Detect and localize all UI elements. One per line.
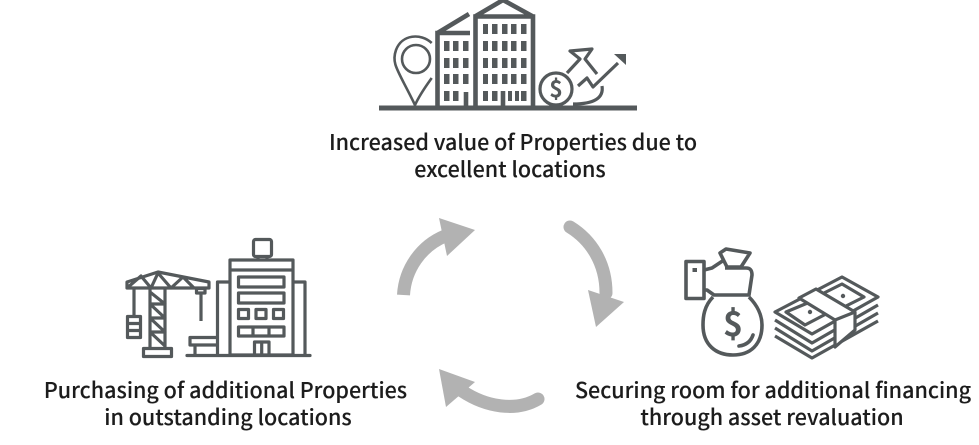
icon part: dollar coin [540, 70, 572, 105]
heading: top caption [329, 126, 697, 184]
icon part: location pin [394, 37, 432, 105]
icon part: paper band [799, 289, 855, 347]
icon part: bag body [703, 297, 762, 355]
icon part: door [254, 342, 269, 355]
caption: securing room: through asset revaluation [640, 401, 904, 432]
icon part: crane load [127, 288, 141, 338]
icon part: left building [438, 14, 470, 108]
icon part: tall building [475, 0, 533, 108]
caption: purchasing: Purchasing of additional Properties [44, 374, 407, 405]
icon part: dollar coin: $ [549, 70, 563, 104]
icon part: dollar sign: $ [723, 297, 743, 346]
icon part: left building windows [444, 41, 468, 101]
icon: stack of banknotes [775, 277, 878, 358]
icon: hand holding money bag [686, 249, 762, 355]
icon part: main building [218, 240, 305, 355]
icon part: bag highlight [739, 335, 753, 346]
icon part: crane hook [196, 288, 205, 321]
arrow: bottom cycle arrow [439, 369, 538, 407]
icon part: tall building windows [483, 24, 526, 101]
caption: securing room [575, 374, 972, 432]
icon part: crane jib [127, 272, 209, 288]
icon part: building windows [238, 277, 284, 336]
arrow: left cycle arrow [404, 218, 475, 295]
icon part: ground line [379, 106, 637, 110]
icon part: hand [704, 260, 752, 295]
icon part: cuff [686, 262, 704, 298]
caption: purchasing: in outstanding locations [104, 401, 352, 432]
caption: securing room: Securing room for additional financing [575, 374, 972, 405]
heading: top caption: Increased value of Properties due to [329, 126, 697, 157]
icon part: bill ornaments [786, 284, 864, 325]
icon: buildings with location pin, coin and rising arrow [379, 0, 637, 110]
caption: purchasing [44, 374, 407, 432]
icon part: stack lines [775, 305, 878, 358]
heading: top caption: excellent locations [414, 153, 606, 184]
icon part: ground and bench [187, 338, 310, 356]
icon part: bag knot [720, 249, 750, 267]
icon part: crane mast and base [144, 288, 172, 356]
icon part: top bill [775, 277, 878, 334]
icon part: rising arrow [578, 54, 626, 87]
icon: crane and building under construction [127, 240, 310, 356]
icon part: money bag outline [567, 49, 602, 104]
arrow: right cycle arrow [570, 227, 624, 327]
